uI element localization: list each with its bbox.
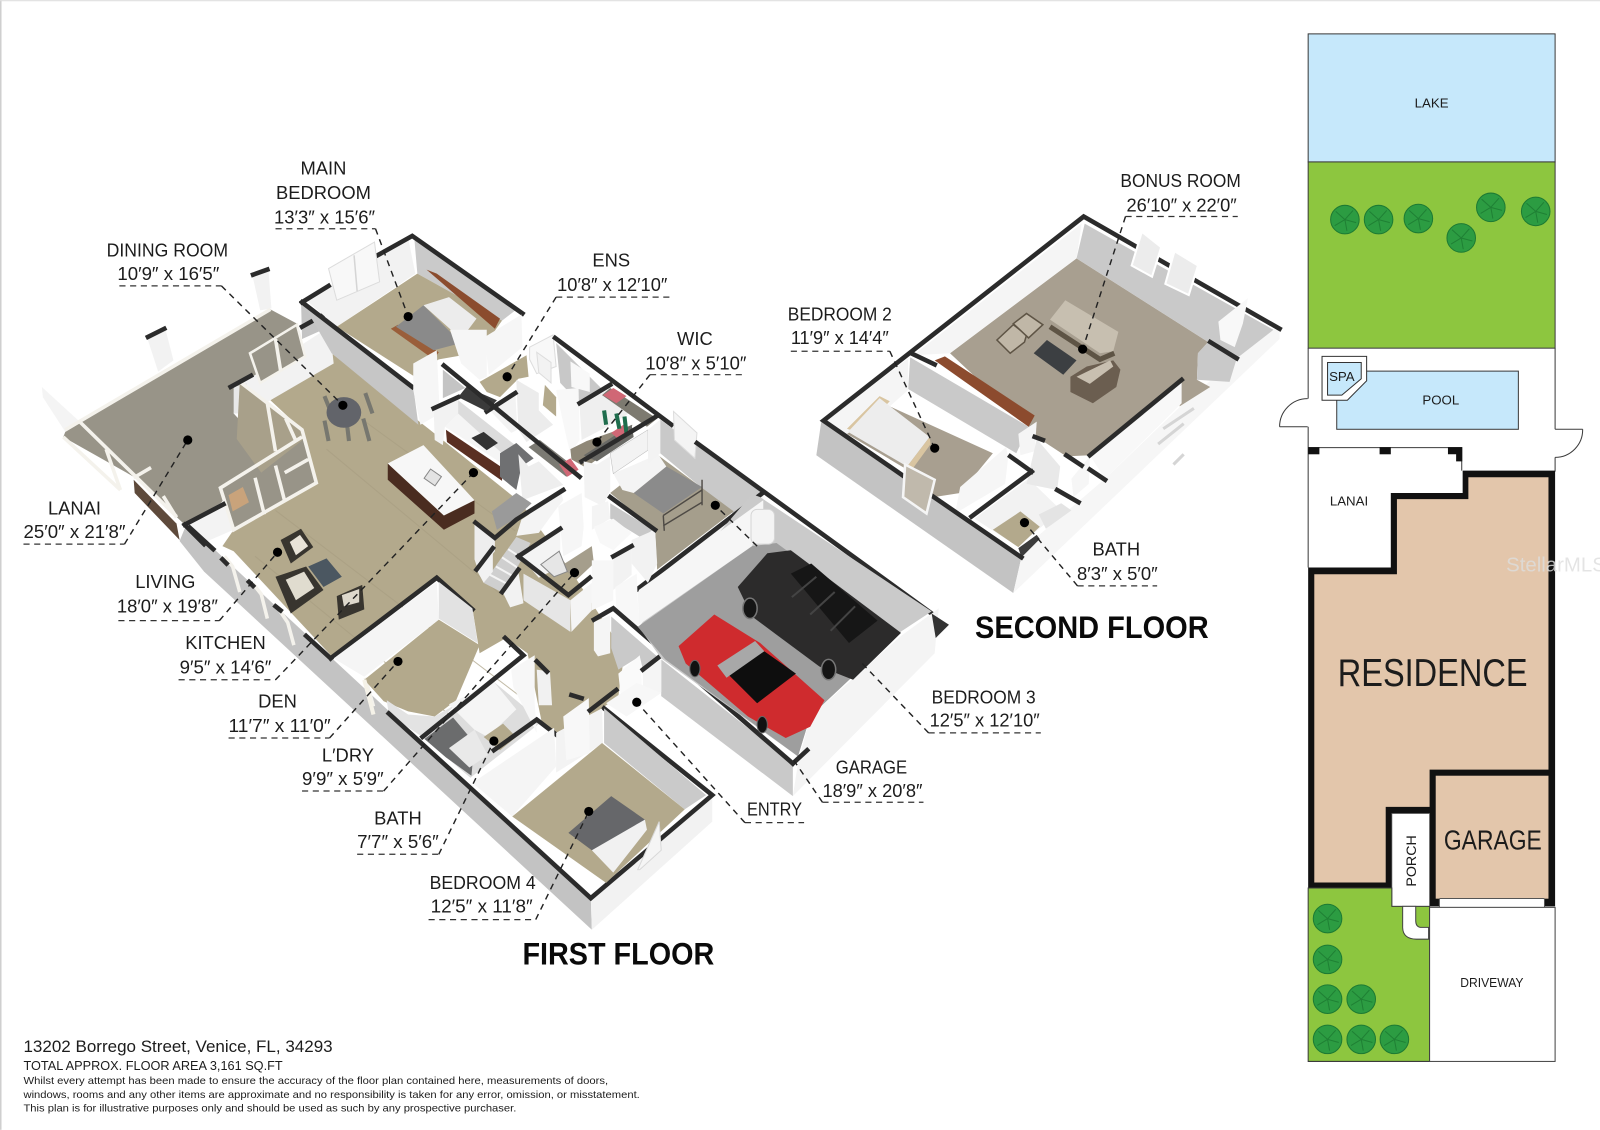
label: second floor bath: 8′3″ x 5′0″: [1077, 563, 1158, 584]
residence: [1308, 471, 1555, 906]
black suv: [738, 550, 901, 680]
label: lanai: LANAI: [48, 497, 101, 518]
label: garage: GARAGE: [836, 757, 907, 778]
walk-in closet: [570, 385, 657, 468]
bedroom 3: [584, 411, 932, 623]
island: [388, 445, 474, 530]
label: bedroom 3: [711, 501, 1041, 733]
lanai: [1308, 447, 1462, 508]
dividing wall: [908, 357, 1037, 455]
label: bonus room: 26′10″ x 22′0″: [1127, 194, 1237, 215]
first floor plan: [42, 236, 949, 930]
label: den: [229, 657, 403, 738]
label: bath: BATH: [374, 808, 422, 829]
first floor bath: [422, 638, 563, 778]
address and disclaimer: Whilst every attempt has been made to ensure the accuracy of the floor plan contained here, measurements of doors,: [23, 1076, 608, 1087]
label: main bedroom: 13′3″ x 15′6″: [274, 207, 376, 228]
en-suite: [480, 335, 671, 477]
address and disclaimer: This plan is for illustrative purposes only and should be used as such by any prospective purchaser.: [23, 1103, 516, 1114]
label: kitchen: 9′5″ x 14′6″: [180, 657, 272, 678]
dining set: [324, 393, 372, 441]
spa: SPA: [1329, 369, 1355, 384]
label: den: DEN: [258, 690, 297, 711]
room markers and leaders: [23, 158, 1241, 920]
label: kitchen: [179, 468, 478, 680]
lanai glazing and wall: [185, 300, 334, 544]
label: bath: [357, 736, 498, 854]
label: ensuite: [503, 250, 669, 381]
bedroom 2: [827, 358, 1008, 513]
bedroom 4: [472, 690, 706, 883]
label: bedroom 4: BEDROOM 4: [430, 872, 536, 893]
second floor bath: [974, 439, 1090, 557]
driveway: [1430, 907, 1555, 1061]
lanai floor: [42, 270, 305, 540]
label: main bedroom: [274, 158, 413, 321]
lake: [1308, 34, 1555, 162]
driveway: DRIVEWAY: [1460, 975, 1524, 990]
second floor plan: [816, 217, 1280, 593]
porch: [1392, 813, 1430, 906]
address and disclaimer: 13202 Borrego Street, Venice, FL, 34293: [23, 1038, 333, 1056]
living furniture: [276, 529, 364, 620]
label: bath: 7′7″ x 5′6″: [357, 831, 439, 852]
label: living: LIVING: [135, 571, 195, 592]
label: bedroom 3: 12′5″ x 12′10″: [930, 710, 1040, 731]
garage: GARAGE: [1444, 825, 1542, 856]
bonus room furniture: [935, 300, 1120, 427]
label: entry: [632, 698, 804, 823]
stair and laundry: [474, 490, 657, 632]
label: laundry: 9′9″ x 5′9″: [302, 768, 384, 789]
front lawn: [1308, 888, 1430, 1061]
label: living: [117, 548, 282, 621]
label: walk-in closet: [592, 328, 747, 447]
label: kitchen: KITCHEN: [185, 632, 266, 653]
label: main bedroom: MAIN: [301, 158, 346, 179]
residence: RESIDENCE: [1338, 652, 1528, 695]
label: bedroom 4: [429, 807, 593, 920]
label: bedroom 3: BEDROOM 3: [932, 686, 1036, 707]
label: laundry: L′DRY: [322, 744, 374, 765]
label: walk-in closet: 10′8″ x 5′10″: [645, 353, 747, 374]
garage: [638, 494, 949, 796]
kitchen: [434, 366, 580, 530]
exterior faces: [816, 330, 1280, 593]
main wood floor: [222, 353, 624, 733]
label: bedroom 2: 11′9″ x 14′4″: [791, 327, 889, 348]
label: walk-in closet: WIC: [677, 328, 713, 349]
entry and hall walls: [594, 608, 793, 763]
site plan: [1280, 34, 1583, 1061]
porch: PORCH: [1404, 835, 1420, 887]
den: [334, 582, 712, 898]
label: bedroom 4: 12′5″ x 11′8″: [431, 895, 533, 916]
label: garage: [794, 757, 923, 802]
red car: [679, 614, 824, 738]
title: first floor: FIRST FLOOR: [522, 935, 714, 971]
label: living: 18′0″ x 19′8″: [117, 595, 218, 616]
lake: LAKE: [1415, 95, 1449, 110]
label: second floor bath: BATH: [1093, 538, 1140, 559]
title: second floor: SECOND FLOOR: [975, 609, 1209, 645]
pool: [1337, 371, 1518, 429]
bonus room windows and door: [903, 232, 1248, 513]
main bedroom: [301, 236, 522, 425]
label: dining room: [107, 239, 347, 410]
garage: [1436, 776, 1548, 908]
second floor wall lines: [823, 217, 1280, 557]
spa: [1322, 356, 1367, 400]
pool deck borders and gates: [1280, 348, 1583, 568]
label: bonus room: [1078, 170, 1241, 354]
label: lanai: [23, 435, 192, 544]
label: bedroom 2: [788, 304, 939, 453]
address and disclaimer: TOTAL APPROX. FLOOR AREA 3,161 SQ.FT: [23, 1058, 283, 1073]
label: entry: ENTRY: [747, 799, 802, 820]
rear lawn: [1308, 162, 1555, 348]
address and disclaimer: [22, 1038, 640, 1114]
label: garage: 18′9″ x 20′8″: [822, 780, 923, 801]
outer wall faces: [180, 524, 793, 930]
bonus room floor: [913, 224, 1273, 456]
label: dining room: 10′9″ x 16′5″: [117, 263, 220, 284]
label: bedroom 2: BEDROOM 2: [788, 304, 892, 325]
label: lanai: 25′0″ x 21′8″: [23, 521, 126, 542]
label: second floor bath: [1020, 518, 1158, 586]
label: ensuite: ENS: [592, 250, 630, 271]
pool: POOL: [1422, 392, 1459, 407]
label: dining room: DINING ROOM: [107, 239, 228, 260]
label: ensuite: 10′8″ x 12′10″: [557, 274, 668, 295]
label: main bedroom: BEDROOM: [276, 182, 371, 203]
stair opening wall: [1090, 380, 1194, 479]
lanai: LANAI: [1330, 493, 1368, 508]
label: den: 11′7″ x 11′0″: [229, 715, 331, 736]
french doors: [190, 528, 472, 706]
address and disclaimer: windows, rooms and any other items are approximate and no responsibility is taken for any error, omission, or misstatement.: [22, 1090, 640, 1101]
label: bonus room: BONUS ROOM: [1120, 170, 1241, 191]
label: laundry: [302, 568, 579, 791]
